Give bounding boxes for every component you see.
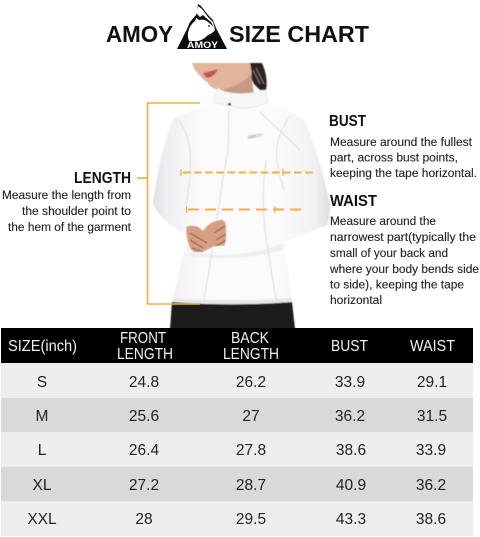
length bracket [137, 103, 200, 304]
waist description: to side), keeping the tape [330, 278, 464, 292]
row L: L [38, 442, 47, 459]
table header: FRONT [120, 330, 166, 347]
table header: BACK [231, 330, 270, 347]
model photo: woman in white quarter-zip top: AMOY [246, 132, 264, 141]
face and neck [192, 63, 254, 102]
table header: SIZE(inch) [8, 338, 77, 355]
table header: LENGTH [223, 346, 279, 363]
table header: BUST [331, 338, 368, 355]
shadow under sleeves [188, 243, 284, 258]
row XXL: XXL [27, 511, 57, 528]
title [106, 4, 369, 50]
table header [1, 328, 473, 363]
waist description [329, 193, 479, 307]
row S: 26.2 [236, 374, 266, 391]
waist description: WAIST [330, 193, 377, 210]
row XL: 28.7 [236, 477, 266, 494]
row XXL: 29.5 [236, 511, 266, 528]
bust description: part, across bust points, [330, 150, 458, 164]
row M: 27 [242, 408, 260, 425]
row M: 36.2 [335, 408, 365, 425]
waist description: Measure around the [330, 214, 436, 228]
size table [1, 328, 473, 536]
collar [213, 88, 268, 108]
shirt seams and logo [179, 108, 300, 300]
row L: 38.6 [336, 442, 366, 459]
lips [203, 69, 218, 78]
model photo: woman in white quarter-zip top [153, 63, 330, 329]
table header: WAIST [410, 338, 455, 355]
waist measuring line [186, 206, 302, 213]
bust description: Measure around the fullest [330, 135, 473, 149]
row L: 33.9 [416, 442, 446, 459]
hair [246, 63, 267, 90]
pants [170, 302, 295, 329]
row M: 25.6 [129, 408, 159, 425]
row M [1, 398, 473, 432]
waist description: horizontal [330, 293, 382, 307]
icon: AMOY bear mountain logo [177, 4, 227, 50]
row S [1, 363, 473, 398]
bust measuring line [181, 169, 315, 176]
row XXL: 28 [135, 511, 153, 528]
row XL: 36.2 [416, 477, 446, 494]
length description: Measure the length from [2, 188, 131, 202]
table header: LENGTH [117, 346, 173, 363]
row S: S [37, 374, 47, 391]
icon: AMOY bear mountain logo: AMOY [187, 40, 218, 50]
row S: 24.8 [129, 374, 159, 391]
row XL [1, 467, 473, 501]
bust description [329, 113, 477, 180]
row XXL: 43.3 [336, 511, 366, 528]
length description: the shoulder point to [22, 204, 131, 218]
row L [1, 432, 473, 467]
row S: 33.9 [335, 374, 365, 391]
row XL: 27.2 [129, 477, 159, 494]
waist description: narrowest part(typically the [330, 230, 476, 244]
hands [186, 219, 227, 253]
row L: 27.8 [236, 442, 266, 459]
row XL: 40.9 [336, 477, 366, 494]
shirt torso and sleeves [153, 88, 330, 304]
row L: 26.4 [129, 442, 159, 459]
row XXL [1, 501, 473, 536]
length description [2, 170, 132, 234]
title: AMOY [106, 21, 173, 47]
title: SIZE CHART [229, 21, 369, 47]
row M: M [36, 408, 48, 425]
length description: the hem of the garment [8, 220, 132, 234]
row M: 31.5 [417, 408, 447, 425]
row XL: XL [33, 477, 52, 494]
row XXL: 38.6 [416, 511, 446, 528]
bust description: BUST [329, 113, 366, 130]
length description: LENGTH [74, 170, 131, 187]
row S: 29.1 [417, 374, 447, 391]
bust description: keeping the tape horizontal. [330, 166, 477, 180]
waist description: small of your back and [330, 246, 448, 260]
